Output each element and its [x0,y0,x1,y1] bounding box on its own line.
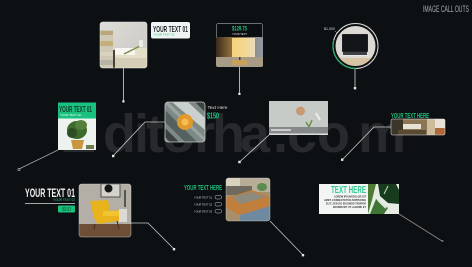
label: your text 01 with price badge: YOUR TEXT 02 [53,198,75,202]
label: your text here option list: YOUR TEXT HERE [184,185,222,192]
label: your text here option list [184,185,222,214]
panel: room image callout [100,22,147,68]
label: your text here option list: YOUR TEXT 02 [194,202,212,206]
label: your text 01 white tag [151,22,190,38]
panel: text here leaf banner: TEXT HERE [331,185,366,196]
connector: lamp [238,66,240,95]
label: laptop price [324,27,337,33]
connector: coffee table [270,221,304,256]
label: your text 01 white tag: YOUR TEXT 02 [154,32,175,36]
label: text here price: Text Here [208,105,228,110]
connector: flower [112,122,165,157]
panel: text here leaf banner: INCIDIDUNT UT LABORE ET [333,205,366,209]
connector: room image [122,68,124,102]
panel: flower image callout [165,102,205,142]
panel: plant callout: YOUR TEXT 02 [60,113,81,117]
label: your text here option list: YOUR TEXT 03 [194,210,212,214]
label: your text 01 with price badge: $50 [62,207,71,213]
panel: lamp price callout: YOUR TEXT [232,32,247,36]
panel: laptop circle callout [333,24,378,69]
panel: living room strip callout [391,113,445,135]
panel: chair image [79,184,131,237]
panel: lamp price callout [216,24,263,67]
panel: coffee table image [226,178,270,221]
panel: plant callout: YOUR TEXT 01 [59,104,92,114]
connector: wide image [238,135,269,163]
panel: wide tabletop image [269,101,328,135]
connector: laptop [354,69,356,89]
panel: text here leaf banner: AMET, CONSECTETUR ADIPISCING [324,198,367,202]
label: your text 01 white tag: YOUR TEXT 01 [153,24,188,34]
panel: text here leaf banner [319,184,399,214]
label: your text 01 with price badge: YOUR TEXT 01 [25,186,75,200]
panel: plant callout [58,102,96,150]
label: text here price [207,105,228,120]
panel: text here leaf banner: ELIT, SED DO EIUSMOD TEMPOR [326,202,367,206]
connector: plant [18,150,58,171]
label: your text 01 with price badge [25,186,75,213]
panel: living room strip callout: YOUR TEXT HERE [391,113,429,120]
connector: chair [131,223,175,250]
label: your text here option list: YOUR TEXT 01 [194,196,212,200]
label: laptop price: $1,000 [324,27,335,31]
panel: lamp price callout: $129.75 [232,26,247,32]
label: text here price: $150 [207,112,219,120]
panel: text here leaf banner: LOREM IPSUM DOLOR SIT [334,194,366,198]
watermark: Editorha.com [60,104,406,164]
connector: leaf banner [399,214,444,242]
connector: living room strip [341,127,391,161]
